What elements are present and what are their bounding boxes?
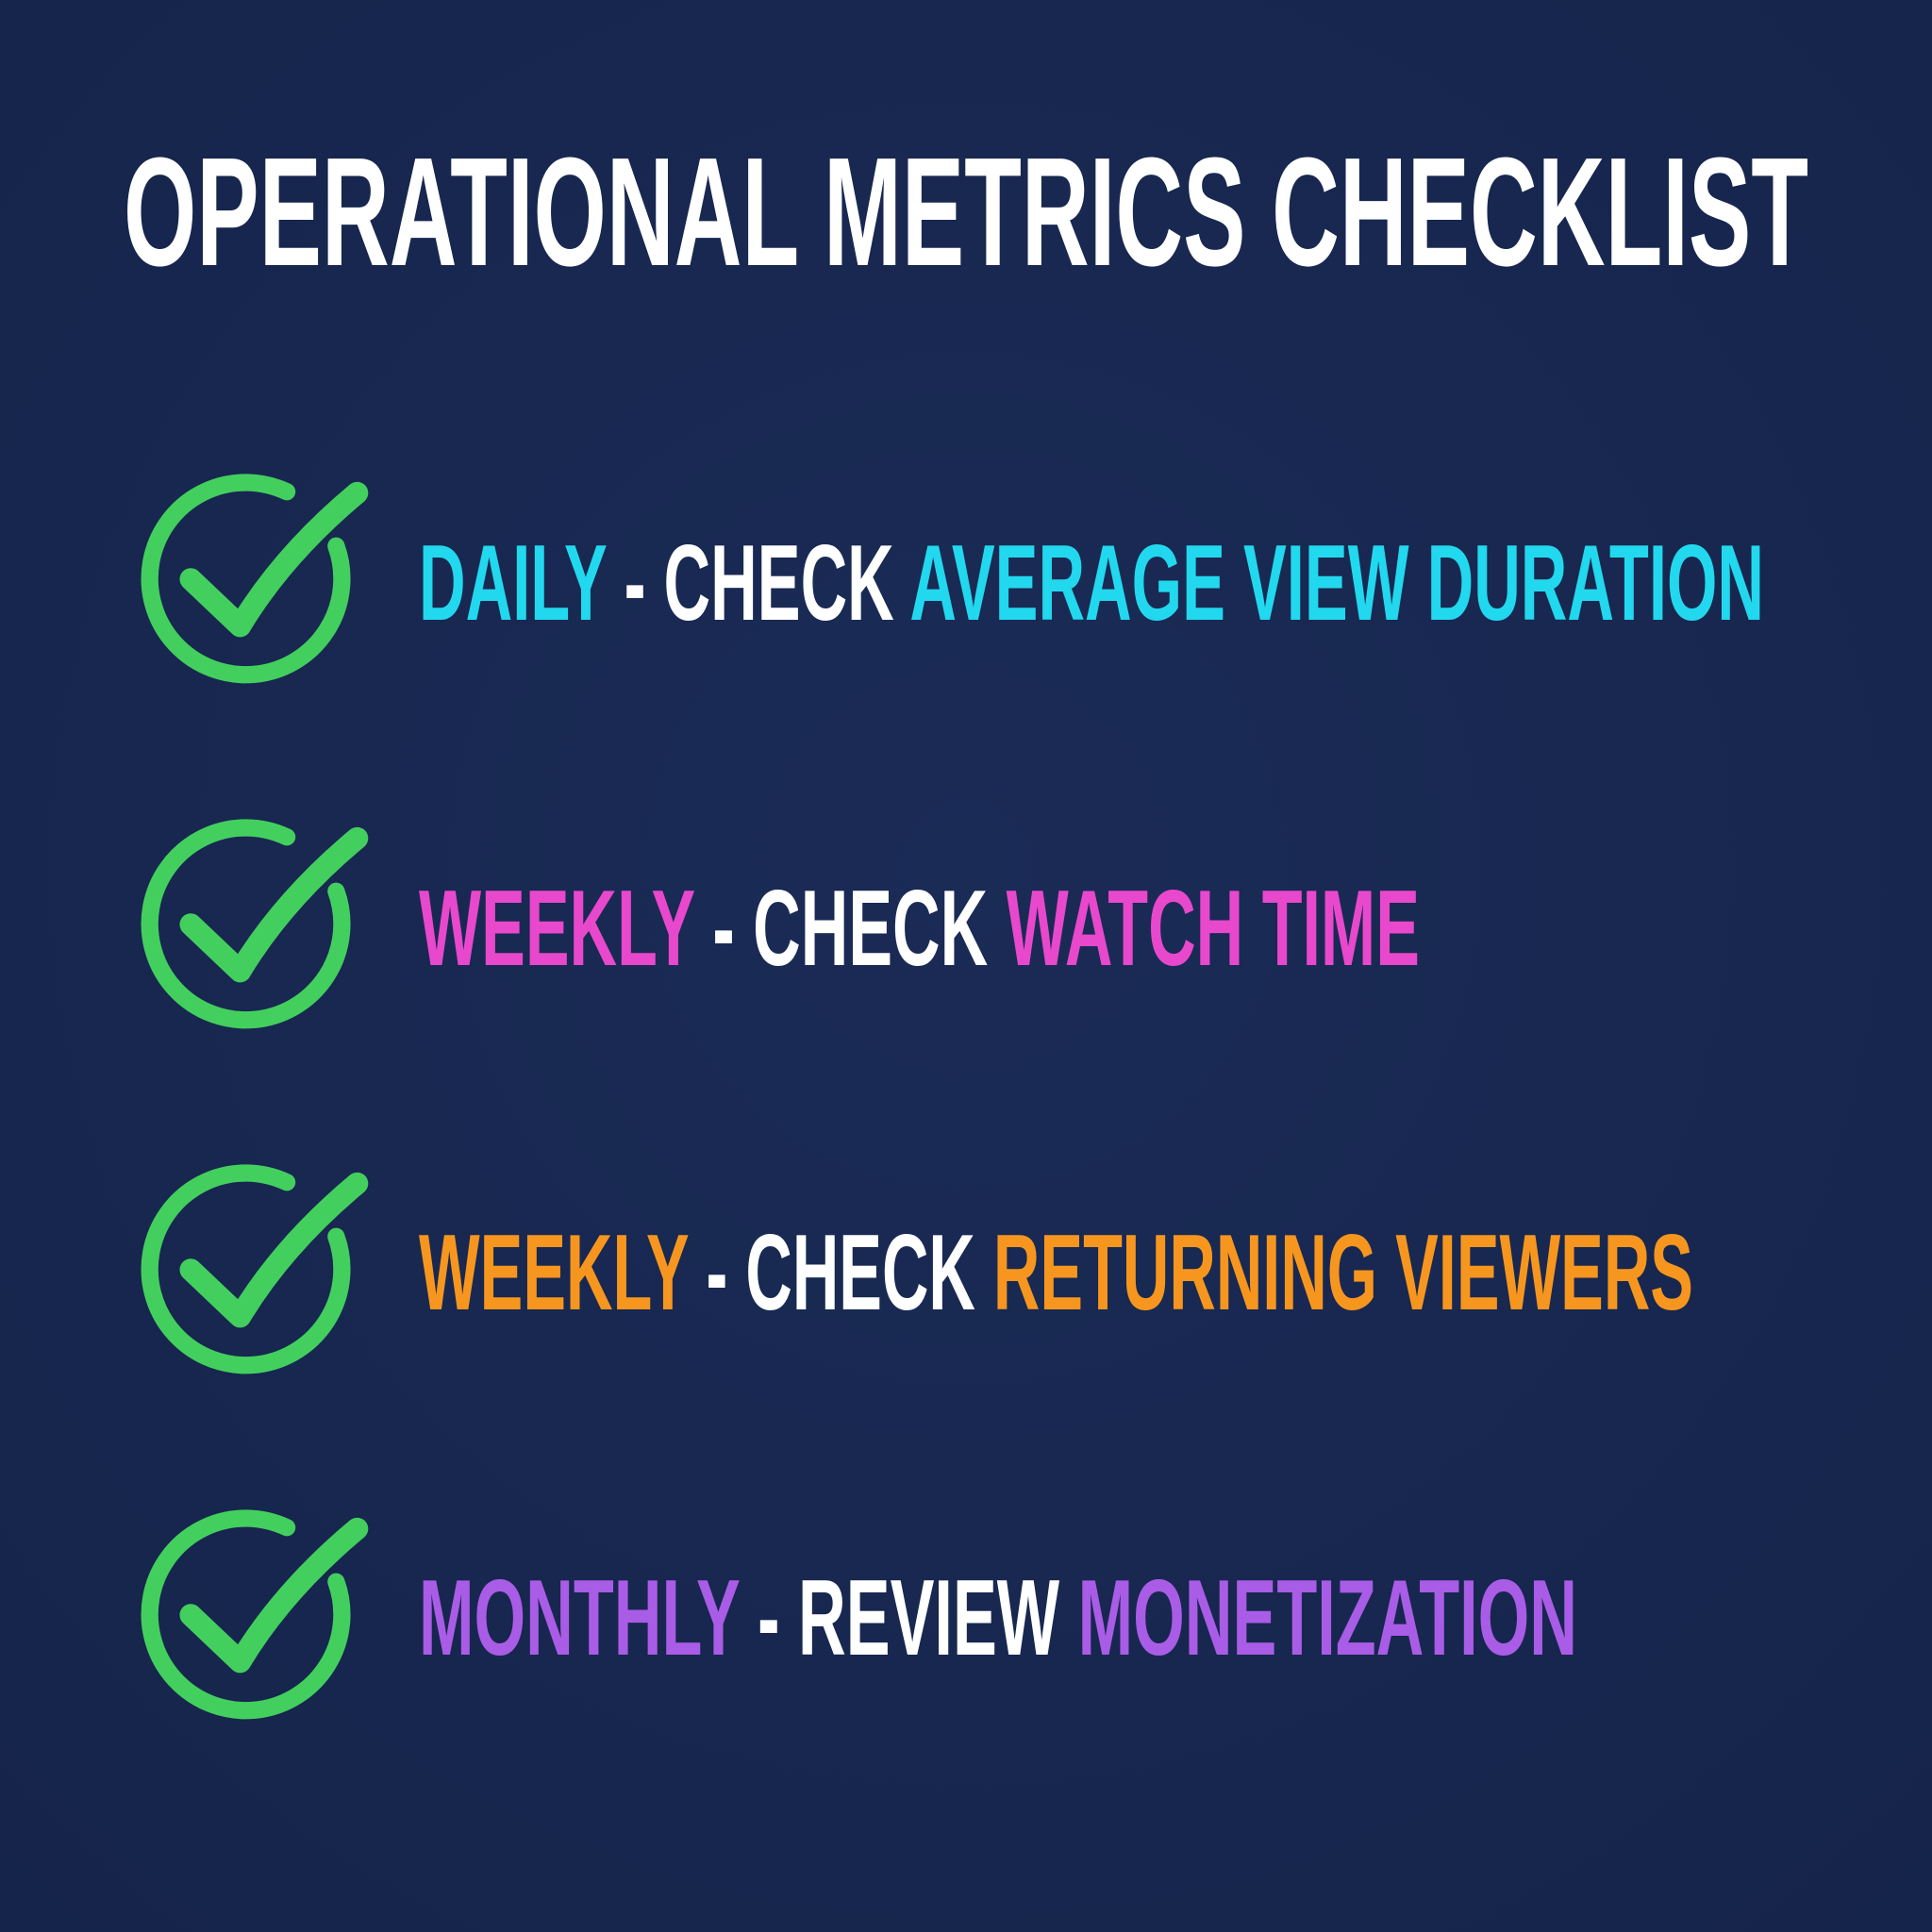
icon: check 4 [150,1518,358,1710]
item 2 text: WEEKLY - CHECK WATCH TIME [419,869,1420,989]
icon: check 1 [150,482,358,675]
icon: check 2 [150,827,358,1020]
item 4 text: MONTHLY - REVIEW MONETIZATION [419,1558,1577,1678]
icon: check 3 [150,1173,358,1365]
